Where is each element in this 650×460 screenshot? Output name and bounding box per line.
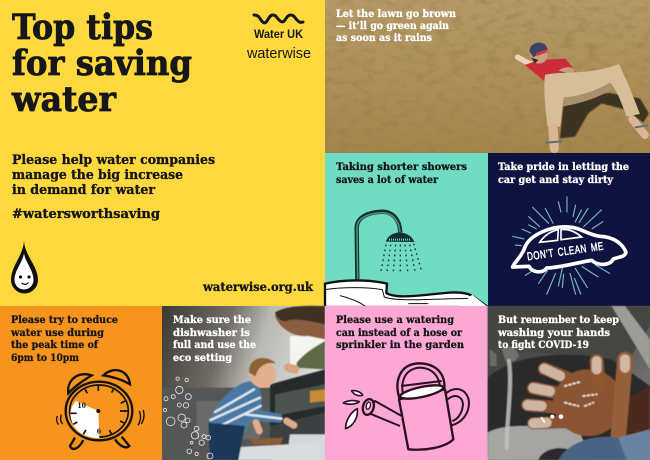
caption: lawn: — it’ll go green again <box>336 20 449 32</box>
caption: dishwasher: eco setting <box>173 352 233 364</box>
logo: Water UK: Water UK <box>254 27 303 41</box>
caption: dishwasher: full and use the <box>173 339 256 351</box>
caption: peak time: 6pm to 10pm <box>11 352 79 364</box>
caption: hand washing: But remember to keep <box>498 314 619 326</box>
icon: alarm clock: 10 <box>77 401 86 410</box>
panel: shorter showers <box>325 153 488 307</box>
caption: watering can: Please use a watering <box>336 314 455 326</box>
message text: in demand for water <box>12 183 155 198</box>
icon: car with sunburst <box>512 196 626 295</box>
caption: peak time: water use during <box>10 327 105 339</box>
panel: peak time <box>0 306 162 460</box>
caption: hand washing: washing your hands <box>497 327 610 339</box>
icon: watering can <box>343 363 469 450</box>
caption: watering can: can instead of a hose or <box>336 327 462 339</box>
caption: hand washing <box>497 314 619 351</box>
icon: car with sunburst: DON’T CLEAN ME <box>526 241 605 263</box>
message text: manage the big increase <box>12 168 183 183</box>
caption: dishwasher <box>173 314 256 364</box>
title: for saving <box>12 43 192 84</box>
caption: car <box>498 161 629 186</box>
illustration: hands washed under a running tap <box>488 306 650 460</box>
caption: dishwasher: dishwasher is <box>173 327 250 339</box>
website address: waterwise.org.uk <box>202 279 313 294</box>
panel: dirty car <box>488 153 650 307</box>
caption: lawn <box>336 8 456 44</box>
caption: watering can: sprinkler in the garden <box>336 339 464 351</box>
title: Top tips <box>12 7 153 48</box>
illustration: man lying on the grass <box>518 43 649 148</box>
caption: lawn: Let the lawn go brown <box>336 8 456 20</box>
panel: yellow introduction <box>0 0 325 307</box>
caption: showers <box>336 161 467 186</box>
logo: waterwise: waterwise <box>246 45 311 62</box>
title <box>11 7 192 120</box>
caption: dishwasher: Make sure the <box>173 314 251 326</box>
caption: showers: Taking shorter showers <box>336 161 467 173</box>
caption: watering can <box>336 314 464 351</box>
message text <box>12 153 215 198</box>
caption: peak time <box>10 314 118 364</box>
icon: shower and bath <box>325 212 488 307</box>
panel: lawn photo <box>325 0 650 153</box>
panel: dishwasher photo <box>162 306 325 460</box>
bubbles <box>163 377 213 459</box>
panel: hand washing photo <box>488 306 650 460</box>
caption: peak time: Please try to reduce <box>11 314 118 326</box>
illustration: parent and child loading dishwasher <box>163 306 325 460</box>
panel: watering can <box>325 306 488 460</box>
caption: car: Take pride in letting the <box>498 161 629 173</box>
caption: showers: saves a lot of water <box>336 174 438 186</box>
caption: peak time: the peak time of <box>11 339 99 351</box>
message text: Please help water companies <box>12 153 215 168</box>
logo: Water UK <box>254 15 303 41</box>
title: water <box>11 79 117 120</box>
caption: car: car get and stay dirty <box>498 174 614 186</box>
icon: alarm clock <box>57 370 144 449</box>
caption: lawn: as soon as it rains <box>336 32 432 44</box>
icon: alarm clock: 6 <box>97 427 102 435</box>
icon: smiling water drop <box>11 241 38 294</box>
hashtag: #watersworthsaving <box>12 207 160 222</box>
caption: hand washing: to fight COVID-19 <box>498 339 589 351</box>
